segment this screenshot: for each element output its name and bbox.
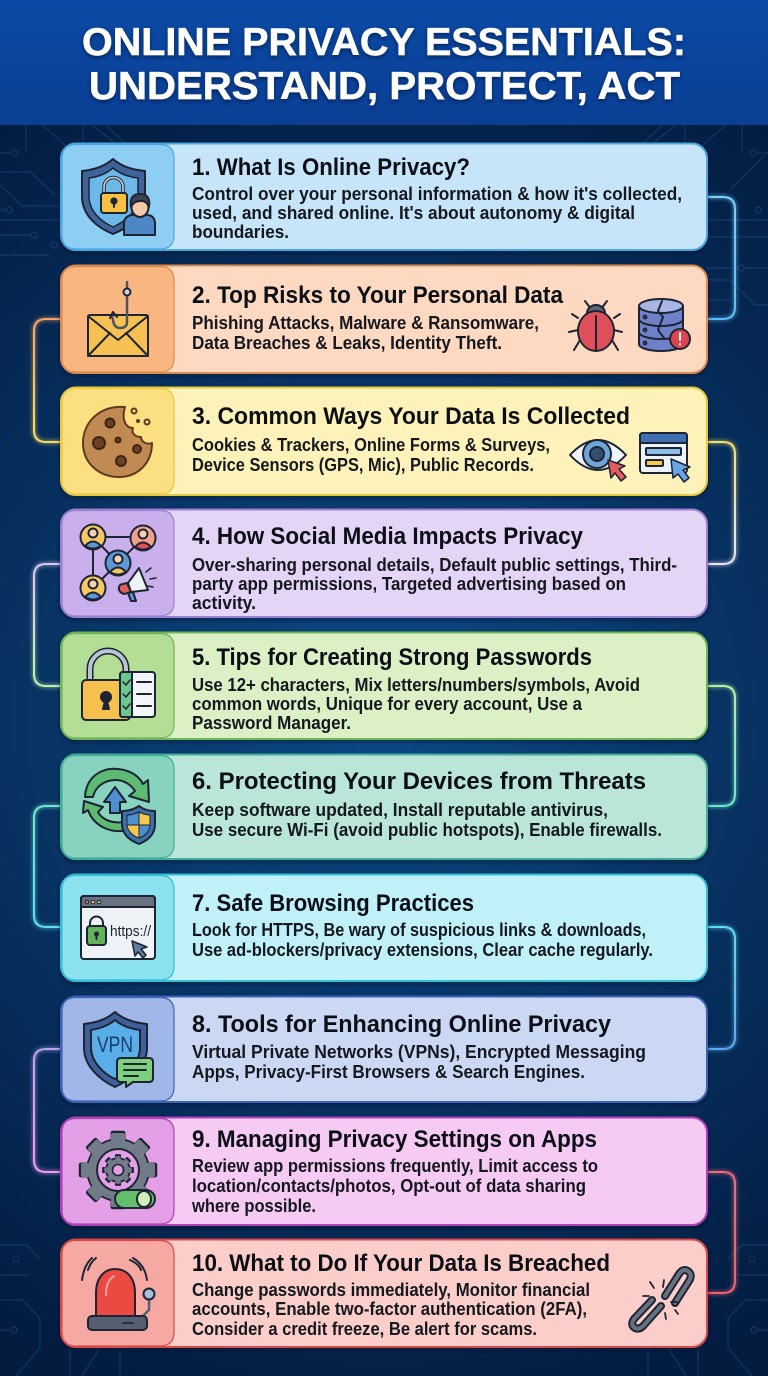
description: Control over your personal information & how it's collected, [192, 184, 682, 204]
panel: 5 strong passwords [61, 632, 707, 739]
panel: 1 what is online privacy [61, 144, 707, 250]
heading: 8. Tools for Enhancing Online Privacy [192, 1011, 612, 1038]
description [191, 1156, 598, 1216]
description [192, 313, 539, 353]
panel: 7 safe browsing [61, 874, 707, 981]
heading: 6. Protecting Your Devices from Threats [192, 768, 646, 795]
description: Consider a credit freeze, Be alert for scams. [192, 1319, 537, 1339]
panel: 6 protecting devices [61, 754, 707, 859]
heading: 1. What Is Online Privacy? [192, 154, 470, 181]
connector 7 to 8 [705, 927, 735, 1049]
description: Device Sensors (GPS, Mic), Public Records. [192, 455, 534, 475]
icon: phishing envelope [88, 282, 148, 356]
icon: eye with cursor [570, 440, 626, 481]
description [192, 1042, 646, 1082]
description [192, 675, 640, 733]
icon: shield with lock and person [82, 159, 155, 235]
description: Use secure Wi-Fi (avoid public hotspots), Enable firewalls. [192, 820, 662, 840]
icon: social network with megaphone [80, 524, 156, 601]
connector 5 to 6 [705, 686, 735, 806]
description: party app permissions, Targeted advertising based on [192, 574, 626, 594]
icon: alarm siren [82, 1258, 154, 1330]
description: Look for HTTPS, Be wary of suspicious links & downloads, [192, 920, 646, 940]
description: Password Manager. [192, 713, 351, 733]
title: ONLINE PRIVACY ESSENTIALS: [82, 21, 686, 64]
icon: browser window with https lock: https:// [110, 924, 152, 940]
panel: 2 top risks [61, 266, 707, 373]
description: Review app permissions frequently, Limit access to [192, 1156, 598, 1176]
description: Use ad-blockers/privacy extensions, Clear cache regularly. [192, 940, 653, 960]
panel: 8 privacy tools [61, 996, 707, 1102]
description [192, 920, 653, 960]
heading: 7. Safe Browsing Practices [192, 890, 474, 917]
connector 8 to 9 [34, 1049, 63, 1172]
description: Keep software updated, Install reputable antivirus, [192, 800, 608, 820]
description: Virtual Private Networks (VPNs), Encrypted Messaging [192, 1042, 646, 1062]
icon: cookie [83, 407, 152, 477]
description [192, 1280, 590, 1339]
panel: 9 app settings [61, 1118, 707, 1225]
connector 9 to 10 [705, 1172, 735, 1293]
icon: update arrows and shield [83, 769, 155, 844]
description: Data Breaches & Leaks, Identity Theft. [192, 333, 502, 353]
heading: 2. Top Risks to Your Personal Data [192, 282, 564, 309]
title: UNDERSTAND, PROTECT, ACT [89, 65, 680, 108]
icon: browser window with https lock [81, 896, 155, 959]
description: Cookies & Trackers, Online Forms & Surveys, [192, 435, 550, 455]
title [82, 21, 686, 108]
icon: damaged database [639, 299, 690, 351]
heading: 4. How Social Media Impacts Privacy [192, 523, 584, 550]
description: activity. [192, 593, 256, 613]
description [192, 800, 662, 840]
description: used, and shared online. It's about autonomy & digital [192, 203, 635, 223]
panel: 4 social media [61, 510, 707, 617]
header banner [0, 0, 768, 125]
description [192, 184, 682, 242]
description: Over-sharing personal details, Default public settings, Third- [192, 555, 677, 575]
icon: bug [569, 301, 622, 351]
connector 6 to 7 [34, 806, 63, 927]
icon: browser form with cursor [640, 433, 690, 482]
connector 2 to 3 [34, 319, 63, 442]
description: common words, Unique for every account, Use a [192, 694, 583, 714]
heading: 10. What to Do If Your Data Is Breached [192, 1250, 610, 1277]
connector 4 to 5 [34, 564, 63, 686]
panel: 10 data breach [61, 1240, 707, 1347]
heading: 9. Managing Privacy Settings on Apps [192, 1126, 597, 1153]
description: boundaries. [192, 222, 289, 242]
icon: VPN shield with chat bubble [84, 1012, 153, 1087]
description: accounts, Enable two-factor authentication (2FA), [192, 1299, 587, 1319]
description: Phishing Attacks, Malware & Ransomware, [192, 313, 539, 333]
connector 1 to 2 [705, 197, 735, 319]
panel: 3 data collection [61, 388, 707, 495]
heading: 5. Tips for Creating Strong Passwords [192, 644, 592, 671]
description: where possible. [191, 1196, 316, 1216]
description [192, 555, 677, 613]
description: Apps, Privacy-First Browsers & Search Engines. [192, 1062, 585, 1082]
icon: VPN shield with chat bubble: VPN [97, 1032, 133, 1057]
icon: broken chain link [632, 1270, 691, 1329]
heading: 3. Common Ways Your Data Is Collected [192, 403, 630, 430]
description: location/contacts/photos, Opt-out of data sharing [192, 1176, 586, 1196]
description [192, 435, 550, 475]
connector 3 to 4 [705, 442, 735, 564]
description: Change passwords immediately, Monitor financial [192, 1280, 590, 1300]
icon: gear and toggle [79, 1131, 157, 1209]
description: Use 12+ characters, Mix letters/numbers/symbols, Avoid [192, 675, 640, 695]
icon: padlock and checklist [82, 651, 155, 720]
